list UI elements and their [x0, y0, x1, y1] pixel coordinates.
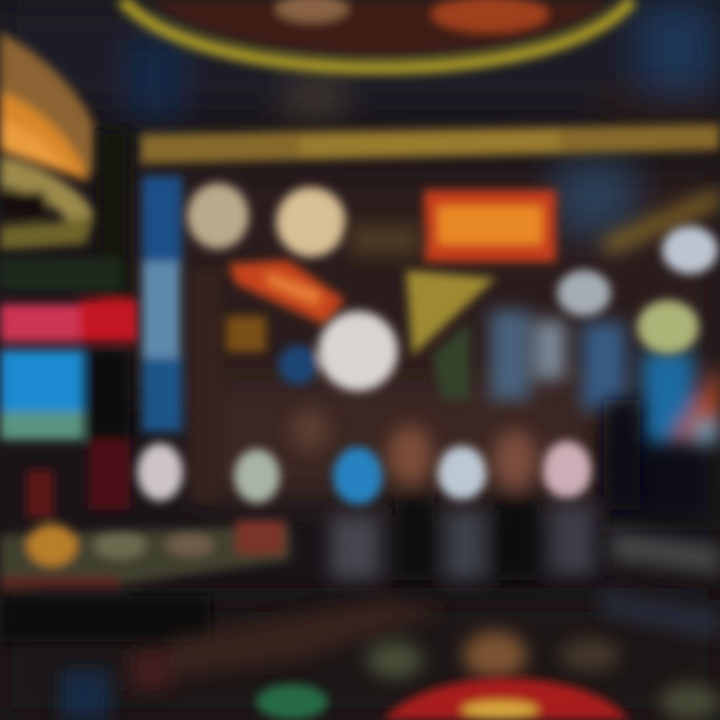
right globes	[557, 226, 718, 354]
gold horizontal beam	[140, 124, 720, 164]
red and blue left panel	[0, 130, 138, 510]
right side panels	[350, 188, 720, 446]
yellow wedge	[406, 270, 496, 400]
left counter	[0, 470, 290, 642]
blue column	[142, 176, 222, 500]
right counter	[600, 530, 720, 640]
players	[290, 400, 640, 580]
white globe	[278, 311, 398, 391]
orange sign	[424, 190, 556, 262]
left stacked sign	[0, 32, 96, 250]
red orange diagonal	[226, 260, 345, 352]
bottom red dome	[256, 678, 630, 720]
row of round stools	[137, 441, 592, 505]
top ring sign	[122, 0, 632, 68]
cream globes	[187, 183, 346, 257]
bottom floor and table	[60, 600, 720, 720]
